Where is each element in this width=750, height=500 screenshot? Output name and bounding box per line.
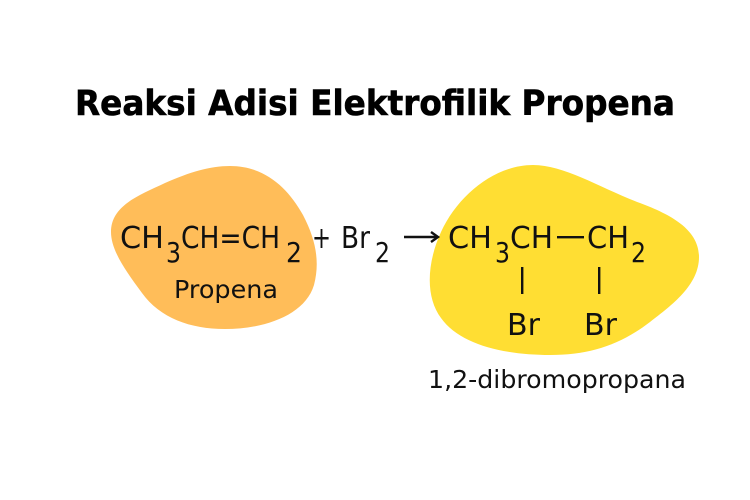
arrow: reaction (404, 232, 438, 242)
bonds and bromine atoms (507, 267, 618, 343)
reagent: plus Br2: + (312, 221, 331, 256)
reagent: plus Br2: 2 (375, 236, 390, 269)
product formula: 3 (495, 236, 510, 269)
product label: 1,2-dibromopropana (428, 365, 686, 394)
propene formula: 2 (286, 236, 302, 269)
bond: carbon-carbon (557, 236, 584, 238)
bonds and bromine atoms: Br (584, 308, 618, 343)
propene formula (120, 221, 302, 269)
product formula (448, 221, 646, 269)
reagent: plus Br2: Br (341, 221, 371, 256)
product formula: CH (448, 221, 492, 256)
reagent: plus Br2 (312, 221, 390, 269)
product formula: CH (587, 221, 629, 256)
product formula: 2 (631, 236, 646, 269)
bonds and bromine atoms: Br (507, 308, 541, 343)
product formula: CH (510, 221, 553, 256)
propene formula: CH (120, 221, 164, 256)
blob: product background (430, 165, 699, 355)
title: Reaksi Adisi Elektrofilik Propena (75, 84, 675, 124)
propene formula: CH=CH (181, 221, 280, 256)
propene formula: 3 (166, 236, 181, 269)
blob: propene background (111, 166, 317, 329)
propene label: Propena (174, 275, 278, 304)
